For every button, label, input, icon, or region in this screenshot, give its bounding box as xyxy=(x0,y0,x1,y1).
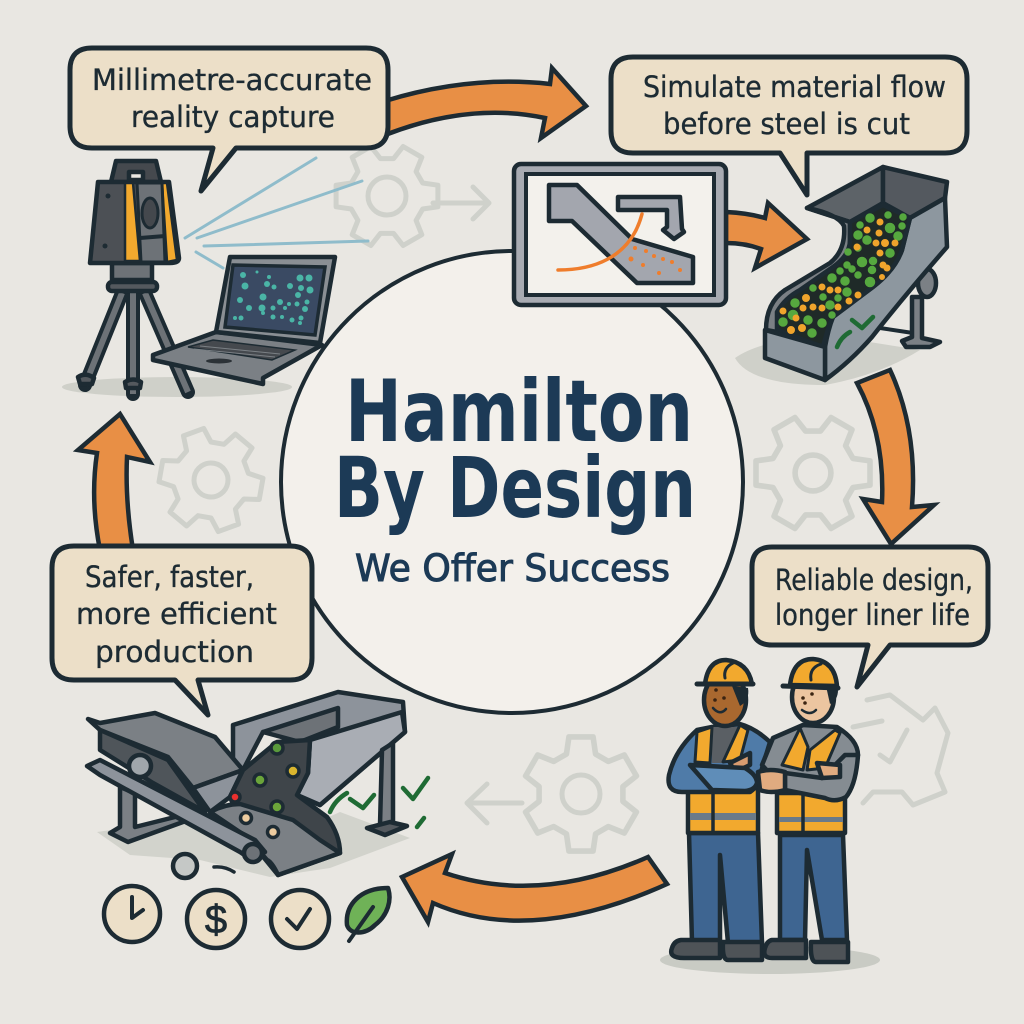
faint gear: behind workers xyxy=(853,695,948,805)
icon: laser scanner on tripod xyxy=(62,158,368,397)
arrow: workers to production xyxy=(402,854,667,922)
arrow: simulation to chute xyxy=(726,203,807,268)
scan rays xyxy=(185,158,368,268)
title block xyxy=(334,362,696,590)
title block: We Offer Success xyxy=(355,547,670,590)
arrow: capture to simulate xyxy=(385,68,586,138)
icon: laptop with point cloud xyxy=(153,257,335,384)
falling balls xyxy=(230,742,299,838)
callout: reliable design: Reliable design, xyxy=(775,563,973,597)
icon: clock xyxy=(104,886,160,942)
title block: By Design xyxy=(334,439,696,537)
callout: reliable design xyxy=(752,547,988,687)
callout: reality capture: reality capture xyxy=(131,100,335,134)
icon: finished screening machine xyxy=(87,692,428,878)
material beads xyxy=(779,212,906,337)
callout: safer faster production: Safer, faster, xyxy=(85,560,254,594)
icon: two workers xyxy=(660,659,880,974)
tripod legs xyxy=(85,293,188,394)
faint gear: left xyxy=(152,422,270,538)
arrow: chute to reliable design xyxy=(857,370,934,544)
icon: dollar xyxy=(187,890,245,948)
icon: dollar: $ xyxy=(205,898,227,942)
callout: safer faster production: more efficient xyxy=(76,597,277,631)
faint gear: right xyxy=(756,418,870,528)
panel: simulation monitor xyxy=(514,164,726,305)
point cloud xyxy=(233,270,314,325)
callout: reliable design: longer liner life xyxy=(775,598,970,632)
icon: leaf xyxy=(347,888,389,941)
icon: chute with material xyxy=(735,167,947,385)
callout: reality capture: Millimetre-accurate xyxy=(92,63,372,97)
callout: reality capture xyxy=(70,48,388,191)
callout: simulate material flow: Simulate material flow xyxy=(643,70,946,104)
worker: right xyxy=(758,659,858,962)
faint gear: bottom centre with arrow xyxy=(467,717,658,871)
callout: safer faster production: production xyxy=(95,635,254,669)
icon: check xyxy=(271,890,329,948)
arrow: production to capture xyxy=(78,414,150,550)
central circle xyxy=(281,251,743,713)
callout: simulate material flow: before steel is cut xyxy=(663,107,910,141)
title block: Hamilton xyxy=(345,362,693,462)
worker: left xyxy=(669,660,770,960)
callout: simulate material flow xyxy=(611,57,967,195)
callout: safer faster production xyxy=(52,546,312,715)
faint gear: top left xyxy=(336,146,489,246)
green checks xyxy=(330,778,428,827)
